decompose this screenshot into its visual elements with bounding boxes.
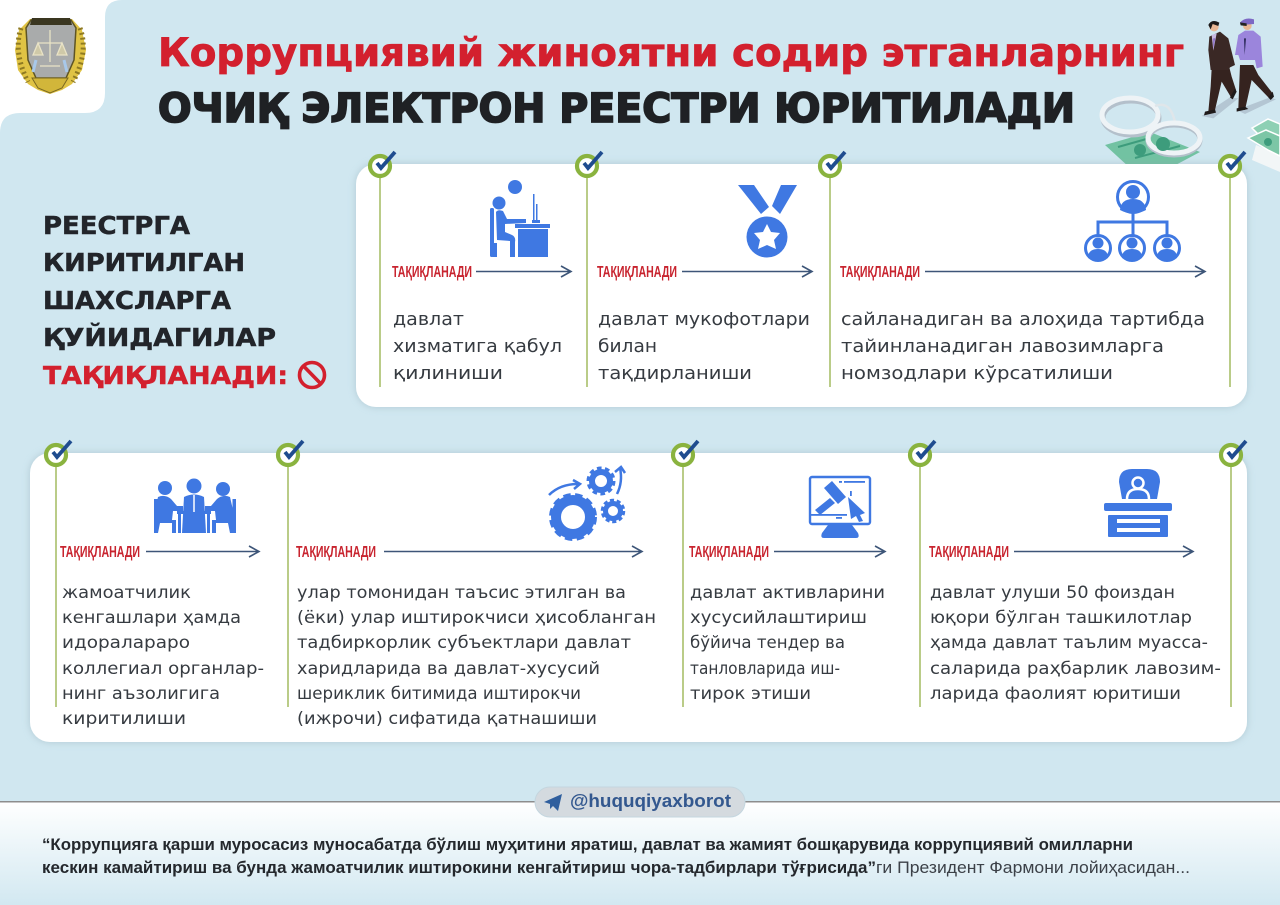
illustration: handcuffs on money xyxy=(1102,98,1200,168)
panel: top restrictions xyxy=(356,152,1247,407)
item 7: management posts: ТАҚИҚЛАНАДИ xyxy=(929,544,1009,561)
title line 2: ОЧИҚ ЭЛЕКТРОН РЕЕСТРИ ЮРИТИЛАДИ xyxy=(158,86,1075,132)
item 4: councils: кенгашлари ҳамда xyxy=(62,608,241,627)
left heading xyxy=(43,211,288,390)
item 6: tenders: тирок этиши xyxy=(690,684,811,703)
item 4: councils: идоралараро xyxy=(62,633,190,652)
item 7: management posts: ларида фаолият юритиши xyxy=(930,684,1181,703)
item 5: procurement: шериклик битимида иштирокчи xyxy=(297,684,581,703)
item 5: procurement: улар томонидан таъсис этилган ва xyxy=(297,583,626,602)
item 4: councils: киритилиши xyxy=(62,709,186,728)
quote text: кескин камайтириш ва бунда жамоатчилик иштирокини кенгайтириш чора-тадбирлари тўғрисида” xyxy=(42,859,876,877)
left heading: ТАҚИҚЛАНАДИ: xyxy=(43,361,288,390)
item 5: procurement: харидларида ва давлат-хусусий xyxy=(297,659,600,678)
footer xyxy=(0,787,1280,905)
heading lines: РЕЕСТРГА xyxy=(43,211,191,240)
item 6: tenders: давлат активларини xyxy=(690,583,885,602)
item 4: councils: ТАҚИҚЛАНАДИ xyxy=(60,544,140,561)
icon: prohibited sign xyxy=(300,362,324,388)
item 2: state awards: билан xyxy=(598,336,657,357)
illustration: detained man and police officer xyxy=(1202,19,1276,118)
quote text: “Коррупцияга қарши муросасиз муносабатда бўлиш муҳитини яратиш, давлат ва жамият бошқарувида коррупциявий омилларни xyxy=(42,836,1133,854)
item 6: tenders: ТАҚИҚЛАНАДИ xyxy=(689,544,769,561)
item 5: procurement xyxy=(278,441,656,728)
item 4: councils: жамоатчилик xyxy=(62,583,191,602)
end marker xyxy=(1220,152,1245,387)
item 5: procurement: (ёки) улар иштирокчиси ҳисобланган xyxy=(297,608,656,627)
item 6: tenders: бўйича тендер ва xyxy=(690,633,845,652)
item 6: tenders: танловларида иш- xyxy=(690,659,840,678)
item 7: management posts: ҳамда давлат таълим муасса- xyxy=(930,633,1208,652)
telegram pill xyxy=(535,787,745,817)
item 4: councils xyxy=(46,441,264,728)
quote text xyxy=(42,836,1190,877)
item 2: state awards xyxy=(577,152,812,387)
item 2: state awards: ТАҚИҚЛАНАДИ xyxy=(597,264,677,281)
item 2: state awards: давлат мукофотлари xyxy=(598,309,810,330)
item 1: civil service: ТАҚИҚЛАНАДИ xyxy=(392,264,472,281)
item 1: civil service: қилиниши xyxy=(393,363,503,384)
item 4: councils: коллегиал органлар- xyxy=(62,659,264,678)
item 1: civil service xyxy=(370,152,571,387)
title line 1: Коррупциявий жиноятни содир этганларнинг xyxy=(158,31,1184,76)
item 3: nominations: номзодлари кўрсатилиши xyxy=(841,363,1113,384)
illustration: banknotes right xyxy=(1248,119,1280,172)
left heading: ҚУЙИДАГИЛАР xyxy=(43,323,276,352)
item 7: management posts: саларида раҳбарлик лавозим- xyxy=(930,659,1221,678)
panel: bottom restrictions xyxy=(30,441,1247,742)
item 3: nominations: ТАҚИҚЛАНАДИ xyxy=(840,264,920,281)
left heading: КИРИТИЛГАН xyxy=(43,248,245,277)
logo badge xyxy=(15,18,86,94)
item 6: tenders: хусусийлаштириш xyxy=(690,608,867,627)
item 5: procurement: ТАҚИҚЛАНАДИ xyxy=(296,544,376,561)
item 3: nominations: сайланадиган ва алоҳида тартибда xyxy=(841,309,1205,330)
item 5: procurement: тадбиркорлик субъектлари давлат xyxy=(297,633,631,652)
telegram pill: @huquqiyaxborot xyxy=(570,791,731,811)
item 7: management posts: давлат улуши 50 фоиздан xyxy=(930,583,1175,602)
end marker bottom xyxy=(1221,441,1246,707)
item 3: nominations: тайинланадиган лавозимларга xyxy=(841,336,1164,357)
item 5: procurement: (ижрочи) сифатида қатнашиши xyxy=(297,709,597,728)
left heading: ШАХСЛАРГА xyxy=(43,286,232,315)
title xyxy=(158,31,1184,132)
item 2: state awards: тақдирланиши xyxy=(598,363,752,384)
quote text: ги Президент Фармони лойиҳасидан... xyxy=(876,859,1190,877)
item 3: nominations xyxy=(820,152,1205,387)
item 7: management posts xyxy=(910,441,1221,707)
item 7: management posts: юқори бўлган ташкилотлар xyxy=(930,608,1192,627)
item 4: councils: нинг аъзолигига xyxy=(62,684,220,703)
item 1: civil service: давлат xyxy=(393,309,464,330)
item 1: civil service: хизматига қабул xyxy=(393,336,562,357)
item 6: tenders xyxy=(673,441,885,707)
